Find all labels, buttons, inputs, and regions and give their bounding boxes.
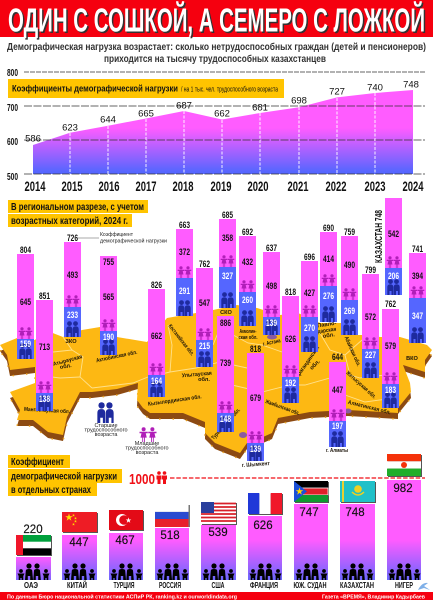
bar: Abai xyxy=(341,227,358,335)
bar: East Kazakhstan xyxy=(409,244,426,343)
bar: Pavlodar: 276 xyxy=(323,291,334,301)
year labels: 2023 xyxy=(364,178,386,194)
country bar: South Sudan: 747 xyxy=(299,507,319,519)
country bar: France xyxy=(248,493,283,590)
subtitle xyxy=(7,41,426,65)
region label: Aktobe: Актюбинская обл. xyxy=(95,349,138,364)
icon: author logo xyxy=(418,583,430,590)
bar: Astana: 637 xyxy=(266,243,277,253)
area chart: dependency ratio 2014-2024 xyxy=(7,68,425,194)
bar: Akmola: 692 xyxy=(242,227,253,237)
bar: Shymkent: 818 xyxy=(250,344,261,354)
bar: Pavlodar: 414 xyxy=(323,254,334,264)
bar: Almaty region: 762 xyxy=(385,299,396,309)
reference line: 1000: 1000 xyxy=(129,471,155,488)
region label: Zhetysu: Жетысуская обл. xyxy=(344,369,378,400)
bar: Almaty city xyxy=(329,352,346,447)
country bar: Russia: 518 xyxy=(160,530,180,542)
map extrusion xyxy=(0,311,432,459)
region label: Karaganda: Карагандинская xyxy=(293,345,321,382)
region label: Atyrau: Атырауская xyxy=(52,354,83,368)
country bar: UAE: 220 xyxy=(23,524,43,536)
year labels: 2020 xyxy=(248,178,269,194)
country bar: Russia: РОССИЯ xyxy=(159,581,181,590)
legend: younger working age: возраста xyxy=(136,450,159,456)
footer band xyxy=(0,592,433,600)
bar: Turkestan: 886 xyxy=(220,318,231,328)
bar: West Kazakhstan: 159 xyxy=(20,339,31,349)
bar: Kazakhstan total: 206 xyxy=(388,271,399,281)
bar: Almaty city: 644 xyxy=(332,352,343,362)
countries heading xyxy=(8,455,122,496)
callout: ratio explanation xyxy=(78,232,167,244)
bar: Akmola: 260 xyxy=(242,295,253,305)
bar: Aktobe: 755 xyxy=(103,257,114,267)
bar: Mangystau: 713 xyxy=(39,342,50,352)
legend: older working age xyxy=(84,402,128,438)
chart heading label xyxy=(8,79,284,98)
bar: Karaganda: 818 xyxy=(285,287,296,297)
data values xyxy=(25,80,419,144)
country bar: China: КИТАЙ xyxy=(67,581,87,590)
bar: Karaganda: 626 xyxy=(285,334,296,344)
bar: Aktobe xyxy=(100,256,117,355)
callout: ratio explanation: демографической нагрузки xyxy=(100,238,167,244)
country bar: Niger: 982 xyxy=(393,483,413,495)
region label: Pavlodar: Павло- xyxy=(317,321,337,329)
region label: Ulytau obl: обл. xyxy=(198,376,210,383)
bar: Astana: 498 xyxy=(266,281,277,291)
country bar: Kazakhstan xyxy=(340,481,376,590)
data values: 740 xyxy=(367,82,383,94)
bar: Turkestan xyxy=(217,316,234,432)
bar: Zhetysu xyxy=(362,265,379,378)
data values: 748 xyxy=(403,80,419,90)
bar: Aktobe: 190 xyxy=(103,332,114,342)
region label: Atyrau obl: обл. xyxy=(59,362,73,371)
bar: Zhetysu: 227 xyxy=(365,350,376,360)
bar: West Kazakhstan xyxy=(17,245,34,359)
bar: Kyzylorda: 662 xyxy=(151,331,162,341)
legend: older working age: трудоспособного xyxy=(84,428,128,434)
year markers xyxy=(70,93,375,174)
region label: Almaty region: Алматинская обл. xyxy=(347,399,392,416)
bar: East Kazakhstan: 741 xyxy=(412,244,423,254)
region label: Akmola: Акмолин- xyxy=(240,329,257,335)
bar: Kazakhstan total: 542 xyxy=(388,229,399,239)
label: Kazakhstan 748: КАЗАХСТАН 748 xyxy=(374,210,385,263)
year labels: 2021 xyxy=(288,178,309,194)
area series xyxy=(33,90,413,174)
data values: 665 xyxy=(138,108,154,120)
chart heading label: / на 1 тыс. чел. трудоспособного возраста xyxy=(181,86,278,94)
city label: Astana: г. Астана xyxy=(262,338,282,348)
year labels: 2014 xyxy=(24,178,46,194)
legend: older working age: Старшие xyxy=(94,423,118,429)
bar: West Kazakhstan: 645 xyxy=(20,297,31,307)
bar: Mangystau: 138 xyxy=(39,394,50,404)
region label: WKO: ЗКО xyxy=(65,339,77,345)
map top surface xyxy=(0,305,432,453)
city markers xyxy=(239,334,352,438)
bar: East Kazakhstan: 347 xyxy=(412,311,423,321)
legend: older working age: возраста xyxy=(95,432,118,438)
region label: Mangystau: Мангистауская обл. xyxy=(24,406,71,415)
country bar: Turkey xyxy=(109,510,144,590)
bar: Pavlodar west xyxy=(301,252,318,352)
country bar: Turkey: ТУРЦИЯ xyxy=(114,581,135,590)
bar: Ulytau xyxy=(196,259,213,367)
bar: Atyrau: 233 xyxy=(67,310,78,320)
bar: Akmola xyxy=(239,227,256,326)
region label: Kyzylorda: Кызылординская обл. xyxy=(148,393,202,408)
country bar: UAE: ОАЭ xyxy=(24,581,38,590)
country bar: China: ★ xyxy=(72,513,75,517)
bar: Karaganda: 192 xyxy=(285,378,296,388)
year labels: 2015 xyxy=(62,178,83,194)
regional heading xyxy=(8,200,148,227)
data values: 681 xyxy=(252,102,268,114)
region label: Pavlodar line three: обл. xyxy=(322,331,336,340)
legend: younger working age: трудоспособного xyxy=(126,446,168,452)
data values: 623 xyxy=(62,122,78,134)
bar: North Kazakhstan: 685 xyxy=(222,210,233,220)
bar: North Kazakhstan xyxy=(219,210,236,308)
country bar: USA: 539 xyxy=(208,527,228,539)
year labels: 2019 xyxy=(210,178,232,194)
legend: younger working age: Младшие xyxy=(135,441,159,447)
regional heading: возрастных категорий, 2024 г. xyxy=(11,216,128,227)
bar: Pavlodar xyxy=(320,223,337,322)
bar: Almaty region: 579 xyxy=(385,341,396,351)
bar: East Kazakhstan: 394 xyxy=(412,271,423,281)
city label: Almaty: г. Алматы xyxy=(326,448,348,454)
country bar: South Sudan xyxy=(294,481,329,590)
bar: Pavlodar west: 696 xyxy=(304,252,315,262)
country bar: China: ★ xyxy=(74,516,77,520)
bar: Shymkent: 139 xyxy=(250,444,261,454)
axis labels xyxy=(7,68,18,183)
country bar: France: ФРАНЦИЯ xyxy=(250,581,278,590)
country bar: USA xyxy=(201,502,237,590)
region label: Kostanay: Костанайская обл. xyxy=(167,323,196,357)
bar: Mangystau xyxy=(36,291,53,411)
bar: West Kazakhstan: 804 xyxy=(20,245,31,255)
bar: Atyrau xyxy=(64,233,81,337)
data values: 698 xyxy=(291,96,307,106)
bar: Almaty city: 447 xyxy=(332,385,343,395)
bar: Abai: 490 xyxy=(344,260,355,270)
bar: Akmola: 432 xyxy=(242,257,253,267)
callout: ratio explanation: Коэффициент xyxy=(100,232,133,238)
data values: 662 xyxy=(214,108,230,120)
bar: Aktobe: 565 xyxy=(103,292,114,302)
country bar: Turkey: 467 xyxy=(115,535,135,547)
bar: Turkestan: 739 xyxy=(220,358,231,368)
bar: Atyrau: 726 xyxy=(67,233,78,243)
region label: Akmola line two: ская обл. xyxy=(238,334,258,341)
country bar: USA: США xyxy=(212,581,225,590)
city label: Shymkent: г. Шымкент xyxy=(242,461,270,469)
year labels: 2022 xyxy=(326,178,347,194)
year labels xyxy=(24,178,424,194)
region label: SKO: СКО xyxy=(220,310,233,316)
axis labels: 500 xyxy=(7,172,18,183)
bar: Kyzylorda: 826 xyxy=(151,280,162,290)
bar: Abai: 759 xyxy=(344,227,355,237)
region label: Ulytau: Улытауская xyxy=(182,371,212,379)
map of Kazakhstan xyxy=(0,305,432,459)
bar: Mangystau: 851 xyxy=(39,291,50,301)
region label: Zhambyl: Жамбылская обл. xyxy=(264,398,301,417)
bar: Astana xyxy=(263,243,280,335)
year labels: 2018 xyxy=(172,178,194,194)
bar: Shymkent xyxy=(247,344,264,461)
country bar: Kazakhstan: 748 xyxy=(345,507,365,519)
bar: Kostanay xyxy=(176,220,193,316)
bar: North Kazakhstan: 327 xyxy=(222,271,233,281)
bar: Kyzylorda: 164 xyxy=(151,376,162,386)
bar: Kostanay: 663 xyxy=(179,220,190,230)
axis labels: 600 xyxy=(7,137,18,148)
year labels: 2024 xyxy=(402,178,424,194)
bar: Zhetysu: 572 xyxy=(365,312,376,322)
country bar: China: ★ xyxy=(72,522,75,526)
bar: North Kazakhstan: 358 xyxy=(222,233,233,243)
chart heading label: Коэффициенты демографической нагрузки xyxy=(12,84,178,94)
country bar: Turkey: ★ xyxy=(126,518,132,524)
country bar: Niger xyxy=(387,454,422,590)
bar: Ulytau: 547 xyxy=(199,298,210,308)
country bar: Russia xyxy=(155,505,190,590)
bar: Kyzylorda xyxy=(148,280,165,397)
bar: Turkestan: 148 xyxy=(220,414,231,424)
bar: Abai: 269 xyxy=(344,306,355,316)
country bar: China xyxy=(62,512,98,590)
region label: Karaganda obl: обл. xyxy=(308,358,322,372)
grid lines xyxy=(24,72,425,174)
bar: Ulytau: 215 xyxy=(199,341,210,351)
bar: Zhetysu: 799 xyxy=(365,265,376,275)
data values: 727 xyxy=(329,86,345,98)
country bar: South Sudan: ЮЖ. СУДАН xyxy=(294,581,327,590)
countries heading: Коэффициент xyxy=(11,456,64,468)
bar: Almaty city: 197 xyxy=(332,421,343,431)
year labels: 2016 xyxy=(98,178,120,194)
bar: Almaty region: 183 xyxy=(385,385,396,395)
countries heading: демографической нагрузки xyxy=(11,470,117,482)
bar: Karaganda xyxy=(282,287,299,403)
countries heading: в отдельных странах xyxy=(11,485,91,496)
country bar: China: 447 xyxy=(69,537,89,549)
country bar: China: ★ xyxy=(65,513,73,522)
region label: EKO: ВКО xyxy=(406,356,419,362)
country bar: South Sudan: ★ xyxy=(296,487,304,496)
bar: Shymkent: 679 xyxy=(250,393,261,403)
region borders xyxy=(36,325,395,405)
data values: 644 xyxy=(100,114,116,126)
country bar: China: ★ xyxy=(74,519,77,523)
country bar: Niger: НИГЕР xyxy=(395,581,413,590)
bar: Pavlodar: 690 xyxy=(323,223,334,233)
axis labels: 800 xyxy=(7,68,18,79)
country bar: France: 626 xyxy=(253,520,273,532)
regional heading: В региональном разрезе, с учетом xyxy=(11,202,144,213)
bar: Kostanay: 372 xyxy=(179,247,190,257)
region label: Pavlodar line two: дарская xyxy=(317,327,337,335)
data values: 586 xyxy=(25,134,41,144)
bar: Astana: 139 xyxy=(266,318,277,328)
bar: Ulytau: 762 xyxy=(199,259,210,269)
legend: younger working age xyxy=(126,427,168,456)
country bar: UAE xyxy=(16,524,52,590)
reference line: 1000 xyxy=(129,471,425,488)
axis labels: 700 xyxy=(7,103,18,114)
bar: Kostanay: 291 xyxy=(179,286,190,296)
bar: Almaty region xyxy=(382,299,399,408)
bar: Pavlodar west: 270 xyxy=(304,323,315,333)
subtitle: приходится на тысячу трудоспособных казахстанцев xyxy=(104,53,326,65)
data values: 687 xyxy=(176,100,192,112)
region label: Abai: Абайская обл. xyxy=(343,335,362,368)
region label: Turkestan: Туркестанская обл. xyxy=(210,407,242,441)
bar: Kazakhstan total xyxy=(385,198,402,295)
country bar: Kazakhstan: КАЗАХСТАН xyxy=(340,581,374,590)
year labels: 2017 xyxy=(136,178,157,194)
bar: Pavlodar west: 427 xyxy=(304,288,315,298)
bar: Atyrau: 493 xyxy=(67,270,78,280)
